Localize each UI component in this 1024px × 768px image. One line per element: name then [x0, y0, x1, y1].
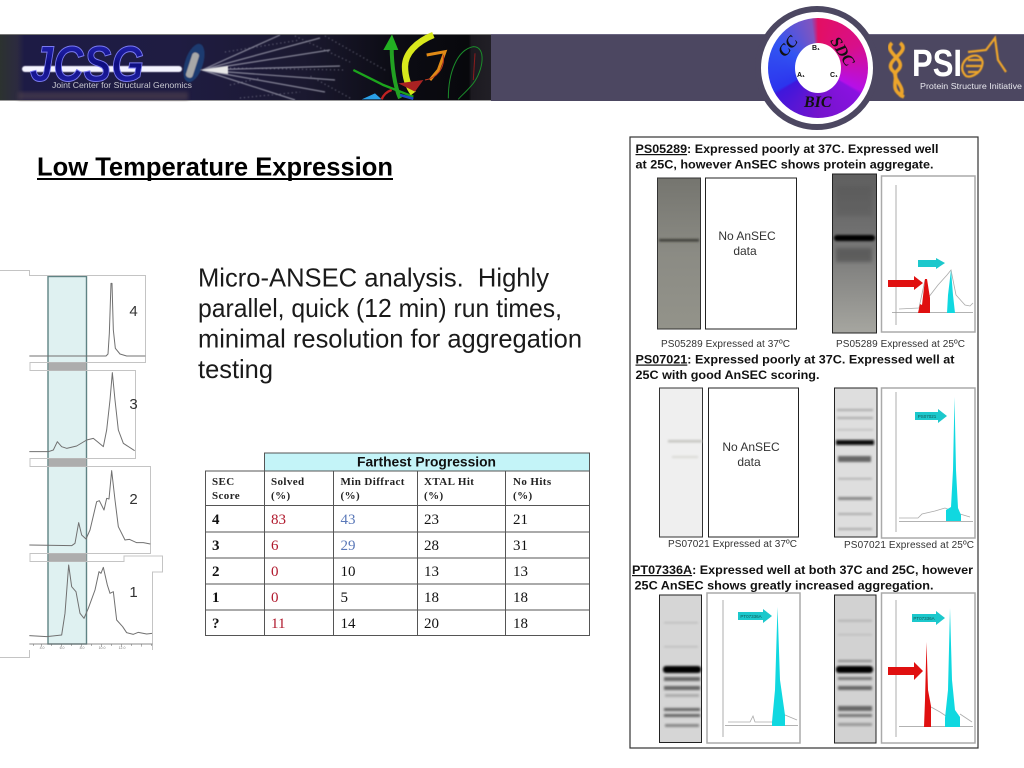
table values: 14	[340, 616, 356, 632]
text block: Micro-ANSEC description: testing	[198, 354, 273, 384]
logo: JCSG: JCSG	[30, 36, 144, 92]
heading: PS07021: 25C with good AnSEC scoring.	[636, 368, 820, 382]
table values: 43	[340, 512, 356, 528]
caption: PS05289 Expressed at 37ºC	[661, 339, 790, 350]
trace: score 4	[29, 283, 145, 356]
chart: PT07336A 37C AnSEC: PT07336A	[740, 614, 762, 619]
icon: protein fold	[962, 38, 1006, 77]
title: Low Temperature Expression	[37, 152, 393, 182]
arrow: cyan PT07336A	[738, 609, 772, 623]
table values: 2	[212, 564, 220, 580]
chart: stacked SEC traces	[0, 270, 162, 658]
caption: PS07021 Expressed at 25ºC	[844, 540, 974, 551]
logo ring: CC, SDC, BIC	[768, 18, 868, 118]
gel: PT07336A 37C	[660, 595, 702, 742]
table values: 0	[271, 590, 278, 606]
table column headings: (%)	[340, 490, 360, 502]
table values: 18	[513, 590, 528, 606]
heading: PS07021: PS07021: Expressed poorly at 37C. Expressed well at	[636, 352, 954, 366]
heading: PS05289: at 25C, however AnSEC shows protein aggregate.	[636, 158, 934, 172]
table column headings: Min Diffract	[340, 476, 405, 488]
axis tick labels: 4.0	[40, 646, 44, 650]
arrow: red aggregate	[888, 276, 923, 290]
table values: 18	[513, 616, 528, 632]
box: no AnSEC data: data	[733, 244, 757, 258]
table values: 4	[212, 512, 220, 528]
table values: 23	[424, 512, 439, 528]
table values: 3	[212, 538, 220, 554]
box: no AnSEC data: No AnSEC	[718, 229, 776, 243]
gel: PS07021 25C	[834, 388, 877, 537]
chart: PS07021 25C AnSEC	[882, 388, 975, 538]
score labels: 4	[129, 303, 138, 320]
gray separators	[48, 362, 86, 562]
table column headings: Solved	[271, 476, 305, 488]
ring label: CC: CC	[775, 33, 802, 60]
trace: score 3	[29, 373, 135, 452]
table column headings	[212, 476, 552, 502]
arrow: cyan PT07336A	[912, 611, 945, 625]
table: Farthest Progression	[205, 453, 590, 636]
table values: 29	[340, 538, 356, 554]
chart: PS07021 25C AnSEC: PS07021	[918, 414, 937, 419]
box: no AnSEC data	[706, 178, 796, 329]
score labels: 1	[129, 584, 138, 601]
table column headings: (%)	[271, 490, 291, 502]
table values: 13	[513, 564, 528, 580]
table values: 21	[513, 512, 528, 528]
table values	[212, 512, 528, 632]
table values: 31	[513, 538, 528, 554]
arrow: cyan PS07021	[915, 409, 947, 423]
header band: JCSG banner	[0, 34, 491, 101]
table values: 83	[271, 512, 286, 528]
table values: 5	[340, 590, 348, 606]
text block: Micro-ANSEC description: Micro-ANSEC analysis. Highly	[198, 262, 549, 292]
table values: 18	[424, 590, 439, 606]
table column headings: SEC	[212, 476, 235, 488]
icon: DNA helix	[890, 43, 904, 97]
table values: 28	[424, 538, 439, 554]
heading: PS07021	[636, 352, 954, 382]
box: no AnSEC data: No AnSEC	[722, 440, 780, 454]
heading: PS05289	[636, 142, 938, 172]
table column headings: XTAL Hit	[424, 476, 474, 488]
table values: 1	[212, 590, 220, 606]
text block: Micro-ANSEC description: parallel, quick (12 min) run times,	[198, 293, 562, 323]
arrow: red aggregate	[888, 662, 923, 680]
trace: score 1	[29, 565, 152, 637]
shaded aggregation band	[48, 276, 86, 644]
table values: ?	[212, 616, 220, 632]
axis tick labels: 6.0	[60, 646, 64, 650]
box: no AnSEC data: data	[737, 455, 761, 469]
header band: PSI banner	[491, 34, 1024, 101]
heading: PT07336A: PT07336A: Expressed well at both 37C and 25C, however	[632, 563, 973, 577]
caption: PS05289 Expressed at 25ºC	[836, 339, 965, 350]
text block: Micro-ANSEC description: minimal resolution for aggregation	[198, 324, 582, 354]
table column headings: No Hits	[513, 476, 552, 488]
chart: PS05289 25C AnSEC	[882, 176, 975, 332]
score labels: 2	[129, 491, 138, 508]
arrow: cyan PS05289	[918, 258, 945, 269]
table column headings: Score	[212, 490, 240, 502]
table values: 11	[271, 616, 285, 632]
table header	[264, 453, 590, 471]
logo: PSI: PSI	[912, 43, 962, 85]
table: Farthest Progression: Farthest Progression	[357, 454, 496, 470]
gel: PS05289 25C	[832, 174, 876, 333]
panel: expression results	[630, 137, 978, 748]
table column headings: (%)	[513, 490, 533, 502]
table column headings: (%)	[424, 490, 444, 502]
icon: x-ray beam	[22, 35, 385, 100]
ring label: A1: A₁	[797, 72, 805, 79]
score labels	[129, 303, 138, 601]
caption: PS07021 Expressed at 37ºC	[668, 539, 797, 550]
box: no AnSEC data	[708, 388, 798, 537]
logo ring backing	[758, 9, 876, 127]
heading: PT07336A	[632, 563, 973, 592]
gel: PT07336A 25C	[834, 595, 876, 743]
gel: PS05289 37C	[658, 178, 700, 329]
gel: PS07021 37C	[660, 388, 702, 537]
table grid	[205, 471, 590, 636]
chart: PT07336A 37C AnSEC	[707, 593, 800, 743]
text block: Micro-ANSEC description	[198, 262, 582, 384]
table values: 20	[424, 616, 439, 632]
logo subtitle: Joint Center for Structural Genomics	[52, 81, 192, 90]
heading: PS05289: PS05289: Expressed poorly at 37C. Expressed well	[636, 142, 938, 156]
ring label: B1: B₁	[812, 45, 820, 52]
axis tick labels: 8.0	[80, 646, 84, 650]
table values: 6	[271, 538, 279, 554]
axis tick labels	[40, 646, 125, 650]
heading: PT07336A: 25C AnSEC shows greatly increased aggregation.	[634, 578, 934, 592]
score labels: 3	[129, 396, 138, 413]
table values: 10	[340, 564, 356, 580]
table values: 13	[424, 564, 439, 580]
trace: score 2	[29, 471, 150, 546]
ring label: C1: C₁	[830, 72, 838, 79]
icon: protein ribbon	[353, 34, 482, 99]
ring label: SDC: SDC	[827, 34, 857, 69]
logo subtitle: Protein Structure Initiative	[920, 81, 1022, 91]
chart: PT07336A 25C AnSEC: PT07336A	[913, 616, 935, 621]
x axis	[29, 643, 152, 645]
chart: PT07336A 25C AnSEC	[882, 593, 975, 743]
ring label: BIC: BIC	[804, 94, 832, 111]
table values: 0	[271, 564, 278, 580]
axis tick labels: 10.0	[99, 646, 105, 650]
axis tick labels: 12.0	[119, 646, 125, 650]
